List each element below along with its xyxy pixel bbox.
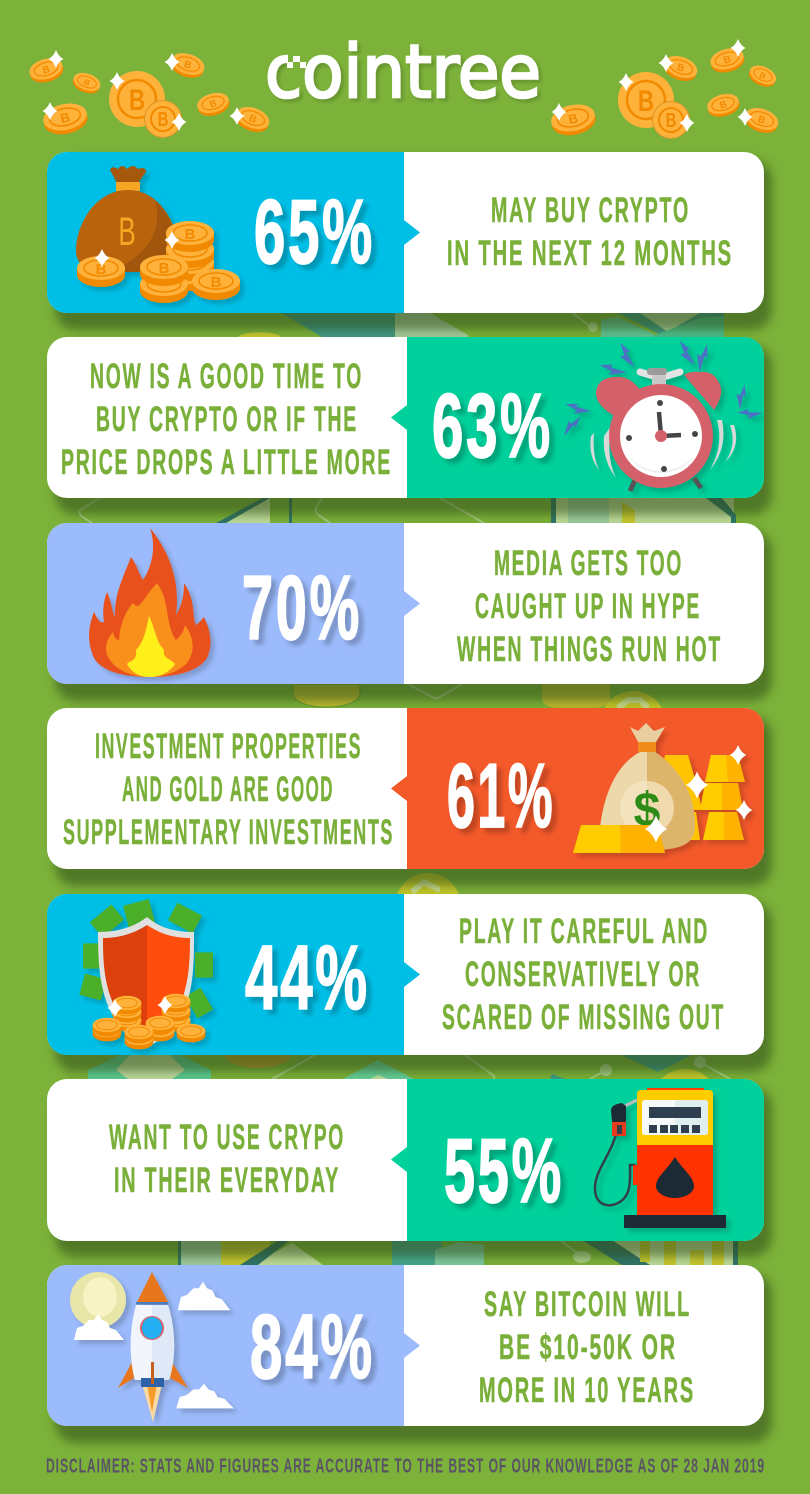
icon: money bag and gold bars	[573, 723, 752, 853]
description	[457, 544, 722, 669]
icon: rocket, moon and clouds	[70, 1272, 234, 1422]
stat: 44%	[245, 928, 370, 1029]
periwinkle stat block	[47, 523, 420, 684]
description: AND GOLD ARE GOOD	[122, 770, 334, 809]
coins: right cluster: B	[758, 70, 767, 81]
coins: right cluster: B	[722, 54, 732, 67]
panel: 44% careful or fomo	[47, 894, 772, 1072]
description	[109, 1118, 345, 1200]
orange stat block	[391, 708, 764, 869]
description: INVESTMENT PROPERTIES	[95, 727, 362, 766]
coins: right cluster: B	[719, 99, 728, 111]
description: PRICE DROPS A LITTLE MORE	[61, 443, 392, 482]
panel: 61% property and gold	[47, 708, 772, 886]
coins: right cluster: B	[567, 110, 579, 127]
description	[479, 1285, 695, 1410]
blue stat block	[47, 152, 420, 313]
icon: money bag and gold bars: $	[634, 784, 661, 837]
blue stat block	[47, 894, 420, 1055]
coins: left cluster: B	[41, 64, 51, 77]
coins: right cluster: B	[675, 62, 686, 75]
coins: left cluster	[27, 49, 272, 138]
coins: left cluster: B	[247, 113, 258, 126]
description	[63, 727, 394, 852]
panel: 84% bitcoin price	[47, 1265, 772, 1443]
stat: 84%	[250, 1297, 375, 1398]
teal stat block	[391, 337, 764, 498]
icon: fuel pump	[595, 1088, 726, 1228]
description	[447, 191, 733, 273]
icon: money bag and coins: B	[211, 274, 222, 291]
periwinkle stat block	[47, 1265, 420, 1426]
description: IN THEIR EVERYDAY	[114, 1161, 340, 1200]
coins: left cluster: B	[209, 98, 218, 110]
description: WANT TO USE CRYPO	[109, 1118, 345, 1157]
panel: 70% media hype	[47, 523, 772, 701]
coins: left cluster: B	[158, 108, 168, 131]
description	[61, 357, 392, 482]
stat: 61%	[447, 746, 555, 847]
coins: right cluster: B	[756, 114, 767, 127]
stat: 55%	[444, 1121, 564, 1222]
coins: right cluster: B	[638, 84, 654, 118]
icon: money bag and coins: B	[96, 261, 107, 278]
description: BE $10-50K OR	[499, 1328, 677, 1367]
coins: left cluster: B	[59, 109, 71, 126]
icon: money bag and coins: B	[118, 209, 136, 254]
stat: 65%	[254, 182, 375, 283]
description: NOW IS A GOOD TIME TO	[90, 357, 363, 396]
icon: alarm clock	[558, 339, 763, 491]
coins: right cluster	[549, 39, 781, 139]
icon: flame	[89, 528, 211, 677]
description	[442, 912, 725, 1037]
description: BUY CRYPTO OR IF THE	[96, 400, 358, 439]
stat: 63%	[432, 376, 553, 477]
panel: 63% good time to buy	[47, 337, 772, 515]
coins: left cluster: B	[82, 77, 91, 88]
icon: shield, banknotes and coins	[79, 899, 213, 1049]
background pattern: faint crypto illustration	[80, 313, 738, 1265]
description: SUPPLEMENTARY INVESTMENTS	[63, 813, 394, 852]
coins: right cluster: B	[666, 109, 676, 132]
coins: left cluster: B	[182, 59, 193, 72]
coins: left cluster: B	[129, 83, 145, 117]
panel: 65% may buy crypto	[47, 152, 772, 330]
logo: cointree: cointree	[265, 30, 541, 115]
icon: money bag and coins	[76, 166, 240, 303]
icon: money bag and coins: B	[185, 226, 196, 243]
panel: 55% everyday use	[47, 1079, 772, 1257]
stat: 70%	[242, 558, 362, 659]
icon: money bag and coins: B	[159, 260, 170, 277]
teal stat block	[391, 1079, 764, 1241]
